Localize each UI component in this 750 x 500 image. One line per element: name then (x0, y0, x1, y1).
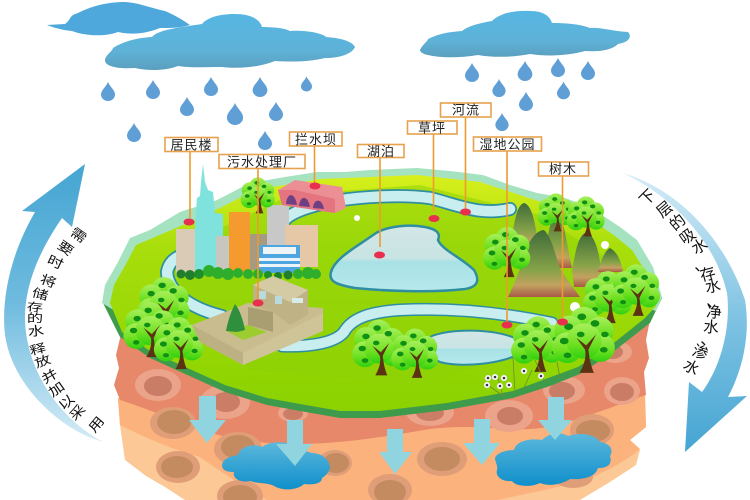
text: right arrow caption: 水 (704, 276, 723, 297)
groundwater pool: left (222, 442, 330, 489)
text: left arrow caption: 采 (67, 401, 89, 424)
text: left arrow caption (26, 225, 108, 436)
text: left arrow caption: 时 (45, 252, 66, 273)
text: left arrow caption: 释 (28, 341, 48, 359)
grass patches (150, 185, 625, 385)
label: lawn: 草坪 (418, 120, 446, 136)
text: left arrow caption: 需 (67, 225, 89, 246)
text: left arrow caption: 的 (27, 312, 43, 324)
arrow: rising water, left (4, 164, 103, 442)
text: left arrow caption: 加 (46, 379, 68, 400)
city: green shrubs (176, 265, 321, 280)
soil: lower light orange layer (118, 395, 646, 500)
text: right arrow caption: 的 (666, 211, 689, 234)
text: right arrow caption (637, 187, 723, 379)
cloud: upper left (47, 2, 190, 35)
tree by plant (241, 177, 275, 213)
label: wetland park: 湿地公园 (479, 137, 536, 152)
city: residential towers and plant (176, 164, 318, 275)
text: right arrow caption: 下 (637, 187, 659, 209)
text: left arrow caption: 要 (54, 239, 76, 259)
text: right arrow caption: 、 (700, 332, 716, 348)
soil pebbles (135, 341, 640, 500)
river: lower branch (282, 309, 552, 346)
text: right arrow caption: 水 (680, 356, 703, 379)
label: lawn (408, 120, 457, 222)
wetland pond (425, 331, 522, 365)
text: left arrow caption: 放 (33, 352, 53, 371)
label: dam: 拦水坝 (295, 132, 337, 147)
label: sewage plant (219, 154, 305, 306)
sewage plant building (192, 276, 323, 365)
cloud: upper right (420, 11, 630, 57)
label: river: 河流 (452, 102, 480, 118)
text: left arrow caption: 存 (26, 300, 44, 314)
label: trees: 树木 (549, 162, 577, 176)
trees (123, 193, 660, 378)
label: river (440, 102, 491, 216)
text: right arrow caption: 层 (654, 199, 676, 221)
text: left arrow caption: 将 (38, 272, 58, 291)
text: right arrow caption: 、 (706, 294, 722, 310)
arrow: infiltration, right (623, 173, 747, 452)
label: lake: 湖泊 (367, 144, 395, 159)
soil: upper red layer (114, 320, 650, 444)
label: residential building: 居民楼 (170, 138, 213, 152)
disc: grass surface (110, 175, 656, 411)
label: trees (538, 162, 588, 326)
label: wetland park (474, 137, 542, 328)
text: left arrow caption: 储 (30, 286, 50, 304)
river: upper and left branch (167, 196, 510, 316)
label: sewage plant: 污水处理厂 (227, 154, 297, 170)
mountains (508, 203, 623, 297)
disc: pale green rim (102, 168, 662, 320)
text: left arrow caption: 水 (27, 323, 45, 340)
text: right arrow caption: 渗 (690, 341, 711, 364)
soil: middle orange layer (118, 380, 646, 500)
disc: dark green edge (103, 250, 662, 418)
lake (330, 226, 477, 291)
raindrops (101, 58, 595, 150)
text: right arrow caption: 存 (698, 264, 718, 285)
text: right arrow caption: 水 (689, 235, 711, 258)
text: right arrow caption: 、 (694, 258, 710, 274)
groundwater pool: right (495, 433, 612, 486)
text: right arrow caption: 吸 (677, 226, 699, 248)
infiltration arrows (189, 396, 572, 474)
starbursts (354, 215, 609, 312)
dam (278, 180, 346, 213)
text: left arrow caption: 以 (56, 392, 78, 414)
text: right arrow caption: 水 (703, 318, 720, 337)
label: lake (358, 144, 404, 258)
label: dam (290, 132, 342, 190)
cloud: upper middle (105, 14, 355, 70)
text: left arrow caption: 用 (86, 414, 108, 436)
text: right arrow caption: 净 (706, 303, 723, 322)
label: residential building (165, 138, 218, 226)
text: left arrow caption: 并 (39, 366, 61, 387)
flowers (484, 358, 560, 396)
